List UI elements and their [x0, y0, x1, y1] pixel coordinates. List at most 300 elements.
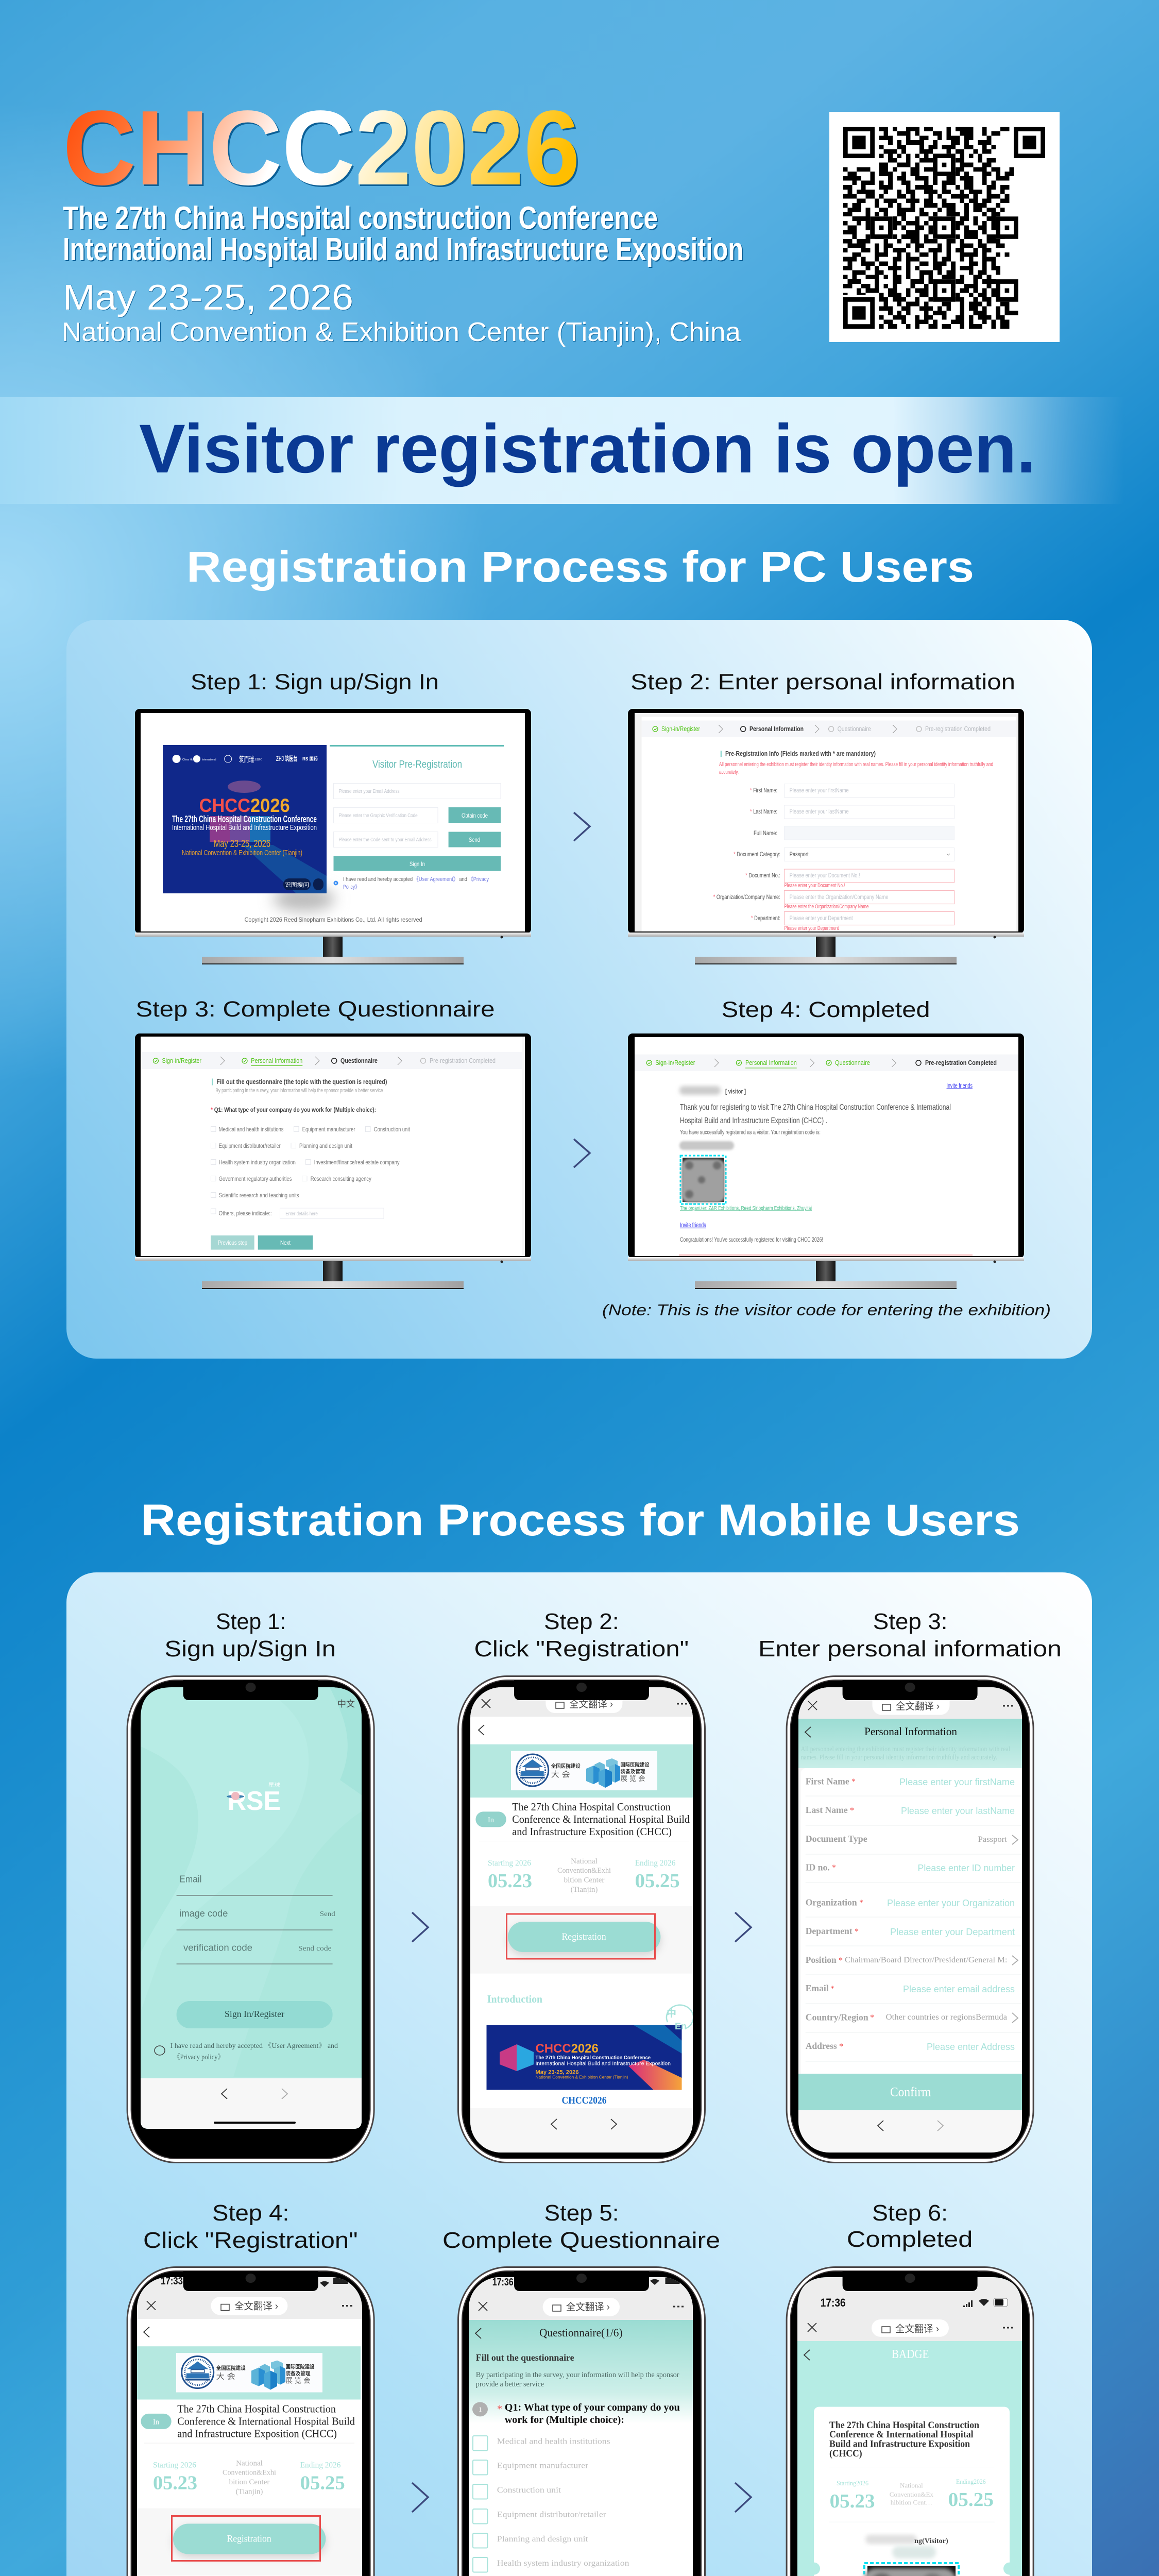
organizer logos: 展 览 会	[285, 2376, 310, 2384]
phone: personal information screen	[786, 1675, 1034, 2163]
conference poster: 识图搜问	[285, 881, 309, 888]
badge event title: (CHCC)	[829, 2448, 862, 2459]
event dates: May 23-25, 2026	[63, 277, 353, 317]
answer options: Medical and health institutions	[497, 2437, 610, 2446]
conference name: The 27th China Hospital construction Conference	[63, 200, 658, 236]
questionnaire header: provide a better service	[476, 2380, 544, 2388]
mobile step 2 label	[474, 1609, 689, 1662]
questionnaire heading: * Q1: What type of your company do you work for (Multiple choice):	[211, 1106, 376, 1113]
registration form	[330, 745, 504, 890]
form card: Please enter email address	[903, 1984, 1015, 1994]
confirmation message: Hospital Build and Infrastructure Exposition (CHCC) .	[680, 1116, 827, 1125]
form fields: * Document No.:	[745, 872, 780, 879]
RSE logo: 星球	[268, 1782, 280, 1788]
form card: Other countries or regionsBermuda	[886, 2013, 1007, 2022]
form card: Department	[806, 1926, 853, 1936]
questionnaire header	[469, 2320, 693, 2424]
badge dates and venue: hibition Cent…	[891, 2499, 932, 2506]
progress nav: Questionnaire	[835, 1059, 870, 1066]
form fields: Please enter your Department	[784, 925, 839, 931]
event dates and venue: Starting 2026	[488, 1859, 531, 1868]
progress nav: Pre-registration Completed	[925, 1059, 997, 1066]
event title: The 27th China Hospital Construction	[177, 2403, 336, 2415]
conference poster: National Convention & Exhibition Center (Tianjin)	[182, 849, 302, 857]
event dates and venue: Convention&Exhi	[557, 1867, 611, 1875]
visitor QR code, blurred	[863, 2563, 959, 2576]
form fields: * Document Category:	[734, 851, 780, 858]
progress nav: Personal Information	[745, 1059, 797, 1066]
copyright: Copyright 2026 Reed Sinopharm Exhibitions Co., Ltd. All rights reserved	[245, 916, 422, 923]
conference poster: ZHJ 筑医台	[276, 755, 297, 762]
event title: In	[153, 2418, 159, 2427]
progress nav	[642, 721, 1016, 737]
agreement checkbox: I have read and hereby accepted 《User Agreement》 and	[171, 2042, 338, 2050]
badge dates and venue: National	[900, 2482, 923, 2489]
confirm button	[798, 2074, 1022, 2110]
badge event title: Conference & International Hospital	[829, 2429, 974, 2440]
form card: *	[839, 1956, 843, 1965]
form heading: accurately.	[719, 769, 739, 775]
conference poster: 筑而瑞	[239, 755, 254, 764]
visitor name, blurred: [ visitor ]	[725, 1088, 746, 1095]
RSE logo	[227, 1782, 280, 1810]
registration form: Please enter your Email Address	[339, 789, 400, 794]
form heading	[719, 750, 993, 775]
progress nav	[635, 1055, 1018, 1071]
question one: Q1: What type of your company do you	[505, 2402, 680, 2413]
wave background	[141, 1687, 362, 2129]
mobile step 4 label: Click "Registration"	[143, 2228, 358, 2253]
phone: questionnaire screen	[457, 2266, 706, 2576]
visitor QR code, blurred	[680, 1156, 726, 1204]
form card: ID no.	[806, 1862, 830, 1873]
browser header: 全文翻译 ›	[566, 2301, 610, 2313]
progress nav: Personal Information	[749, 725, 804, 733]
introduction section: National Convention & Exhibition Center (Tianjin)	[536, 2075, 628, 2079]
form card: Please enter Address	[927, 2042, 1015, 2052]
browser nav bar	[878, 2121, 943, 2131]
mobile step 3 label: Step 3:	[873, 1609, 948, 1634]
form card: Organization	[806, 1897, 857, 1908]
organizer and footer links: Invite friends	[680, 1221, 706, 1229]
event venue: National Convention & Exhibition Center (Tianjin), China	[62, 317, 741, 347]
question one	[472, 2402, 680, 2426]
previous and next buttons	[211, 1235, 313, 1250]
event title	[141, 2403, 355, 2443]
phone: click registration screen	[457, 1675, 706, 2163]
event detail content: 全文翻译 ›	[569, 1699, 613, 1710]
badge dates and venue: Starting2026	[837, 2479, 868, 2487]
answer options: Equipment distributor/retailer	[497, 2511, 606, 2519]
status bar	[161, 2276, 348, 2287]
event title: The 27th China Hospital Construction	[512, 1801, 671, 1813]
event dates and venue: 05.23	[153, 2472, 197, 2494]
organizer logos: 展 览 会	[620, 1774, 645, 1783]
badge dates and venue: 05.23	[830, 2490, 875, 2512]
questionnaire options: Construction unit	[374, 1126, 410, 1133]
confirmation message	[679, 1103, 951, 1150]
agreement checkbox: 《Privacy policy》	[174, 2053, 224, 2061]
questionnaire options	[211, 1126, 410, 1219]
event detail content	[131, 2297, 361, 2576]
introduction section: CHCC2026	[561, 2095, 607, 2106]
answer options: Planning and design unit	[497, 2535, 588, 2544]
form card: First Name	[806, 1776, 849, 1787]
phone: sign in screen	[127, 1675, 375, 2163]
progress nav: Pre-registration Completed	[925, 725, 991, 733]
form card: Email	[806, 1983, 829, 1993]
form card: Position	[806, 1955, 837, 1965]
browser header: 全文翻译 ›	[896, 1701, 940, 1712]
event title	[475, 1801, 690, 1841]
organizer logos: 装备及管理	[620, 1768, 645, 1775]
questionnaire options: Equipment distributor/retailer	[219, 1142, 281, 1149]
conference poster: International	[202, 758, 216, 761]
organizer logos: 国际医院建设	[620, 1761, 649, 1768]
progress nav: Sign-in/Register	[661, 725, 701, 733]
mobile step 4 label	[143, 2200, 358, 2253]
sign-in fields: image code	[179, 1908, 228, 1919]
answer options: Equipment manufacturer	[497, 2462, 589, 2470]
form card: *	[851, 1777, 856, 1786]
mobile step 1 label: Step 1:	[216, 1609, 286, 1634]
monitor: step 2 personal information screen	[628, 709, 1024, 964]
introduction section	[486, 1993, 693, 2106]
confirm button: Confirm	[890, 2086, 931, 2099]
form header: names. Please fill in your personal identity information truthfully and accurately.	[801, 1754, 997, 1761]
event title: Conference & International Hospital Build	[177, 2415, 355, 2428]
event title: In	[488, 1816, 494, 1824]
introduction section: May 23-25, 2026	[536, 2070, 579, 2076]
form card: *	[850, 1806, 854, 1815]
form heading: Pre-Registration Info (Fields marked with * are mandatory)	[725, 750, 876, 757]
badge header: BADGE	[892, 2348, 929, 2361]
header: event title block	[62, 89, 743, 347]
questionnaire heading: Fill out the questionnaire (the topic with the question is required)	[216, 1078, 387, 1086]
introduction section: 中	[667, 2008, 676, 2019]
sign-in fields: Send	[320, 1910, 335, 1918]
registration form: Send	[469, 836, 480, 843]
event detail content: 全文翻译 ›	[234, 2301, 278, 2312]
organizer logos: 国际医院建设	[285, 2364, 314, 2370]
badge card	[808, 2407, 1016, 2576]
conference poster	[163, 745, 327, 893]
browser header: 17:36	[821, 2296, 846, 2309]
sign-in button: Sign In/Register	[225, 2009, 284, 2019]
organizer logos	[511, 1751, 657, 1790]
form card: Please enter your Department	[890, 1927, 1015, 1937]
sign-in fields: verification code	[183, 1942, 252, 1953]
answer options: Health system industry organization	[497, 2559, 629, 2568]
invite friends link: Invite friends	[947, 1082, 973, 1090]
arrow: step 1 to step 2	[574, 812, 590, 841]
sign-in fields: Email	[179, 1874, 201, 1885]
exposition name: International Hospital Build and Infrastructure Exposition	[63, 232, 743, 267]
browser header	[798, 1687, 1022, 1719]
registration button, highlighted	[470, 1906, 693, 1974]
questionnaire heading	[211, 1078, 387, 1113]
arrow: mobile step 5 to 6	[735, 2483, 751, 2512]
badge event title: The 27th China Hospital Construction	[829, 2420, 979, 2431]
form fields: * First Name:	[750, 787, 777, 794]
badge dates and venue: Convention&Ex	[890, 2490, 934, 2498]
form fields: Please enter your Document No.!	[790, 872, 860, 879]
event dates and venue: (Tianjin)	[571, 1886, 598, 1894]
progress nav: Pre-registration Completed	[430, 1057, 496, 1064]
organizer and footer links: The organizer: Z&R Exhibitions, Reed Sinopharm Exhibitions, Zhuyitai	[680, 1205, 812, 1211]
organizer logos: 大 会	[216, 2372, 235, 2381]
form card: *	[832, 1863, 836, 1872]
badge dates and venue	[829, 2478, 995, 2522]
visitor name, blurred	[679, 1086, 746, 1095]
mobile step 4 label: Step 4:	[212, 2200, 289, 2226]
event dates and venue: bition Center	[229, 2478, 269, 2486]
form card: Chairman/Board Director/President/General M:	[845, 1956, 1008, 1964]
form card: Passport	[978, 1835, 1007, 1844]
conference poster: CHCC2026	[199, 795, 290, 816]
banner: visitor registration is open: Visitor registration is open.	[139, 411, 1036, 487]
visitor name, blurred	[865, 2535, 948, 2558]
registration form: Sign In	[410, 860, 425, 868]
form card: *	[839, 2042, 843, 2051]
note: visitor code: (Note: This is the visitor code for entering the exhibition)	[602, 1301, 1051, 1319]
step 1 label: Step 1: Sign up/Sign In	[191, 670, 439, 694]
organizer logos: 全国医院建设	[216, 2365, 246, 2371]
organizer logos: 全国医院建设	[551, 1762, 581, 1769]
registration form: Policy》	[343, 884, 360, 890]
event dates and venue: bition Center	[564, 1876, 604, 1885]
browser header: 全文翻译 ›	[895, 2324, 939, 2335]
mobile step 1 label: Sign up/Sign In	[164, 1636, 336, 1662]
conference poster: China Hospital	[182, 758, 199, 761]
form card: *	[830, 1985, 834, 1993]
event dates and venue: Ending 2026	[635, 1859, 675, 1868]
form card: *	[855, 1927, 859, 1936]
event dates and venue: National	[571, 1857, 598, 1866]
questionnaire options: Enter details here	[285, 1211, 318, 1217]
registration form: Obtain code	[462, 812, 488, 819]
questionnaire heading: By participating in the survey, your information will help the sponsor provide a better service	[215, 1088, 383, 1094]
form fields: * Organization/Company Name:	[713, 893, 780, 901]
badge event title: Build and Infrastructure Exposition	[829, 2439, 970, 2450]
progress nav: Questionnaire	[838, 725, 871, 733]
RSE logo: RSE	[228, 1786, 281, 1816]
form fields: * Last Name:	[750, 808, 777, 815]
form card: Please enter your firstName	[899, 1777, 1015, 1787]
form fields: * Department:	[751, 914, 780, 922]
event dates and venue: National	[236, 2460, 263, 2468]
registration button, highlighted: Registration	[561, 1931, 606, 1942]
mobile step 6 label: Step 6:	[872, 2200, 948, 2226]
event detail content	[470, 1687, 693, 2153]
questionnaire options: Health system industry organization	[219, 1159, 296, 1166]
form card: Address	[806, 2041, 837, 2051]
progress nav: Sign-in/Register	[655, 1059, 695, 1066]
phone: completed badge screen	[786, 2266, 1034, 2576]
panel: PC registration steps	[66, 620, 1092, 1359]
progress nav	[142, 1052, 522, 1069]
conference poster: International Hospital Build and Infrastructure Exposition	[172, 823, 317, 832]
step 3 label: Step 3: Complete Questionnaire	[136, 997, 495, 1022]
mobile step 2 label: Click "Registration"	[474, 1636, 689, 1662]
questionnaire options: Research consulting agency	[311, 1175, 371, 1182]
form card: Please enter ID number	[918, 1863, 1015, 1873]
badge header	[804, 2348, 929, 2361]
mobile step 2 label: Step 2:	[544, 1609, 619, 1634]
questionnaire options: Scientific research and teaching units	[219, 1192, 299, 1199]
confirmation message: Thank you for registering to visit The 27th China Hospital Construction Conference & International	[680, 1103, 951, 1112]
event title: and Infrastructure Exposition (CHCC)	[512, 1825, 672, 1838]
form fields: Please enter the Organization/Company Name	[790, 893, 889, 901]
questionnaire options: Others, please indicate::	[219, 1210, 272, 1217]
mobile step 6 label: Completed	[847, 2227, 973, 2252]
conference poster: RS 国药	[302, 756, 318, 761]
introduction section: The 27th China Hospital Construction Conference	[536, 2055, 651, 2061]
form fields: Please enter your firstName	[790, 787, 849, 794]
introduction section: CHCC2026	[536, 2042, 599, 2056]
arrow: step 3 to step 4	[574, 1139, 590, 1167]
event dates and venue	[153, 2460, 345, 2496]
conference poster: May 23-25, 2026	[214, 838, 270, 850]
questionnaire options: Investment/finance/real estate company	[314, 1159, 400, 1166]
badge dates and venue: 05.25	[948, 2489, 994, 2511]
conference poster: The 27th China Hospital Construction Conference	[172, 814, 317, 824]
form header: Personal Information	[864, 1725, 957, 1738]
mobile step 5 label	[442, 2200, 720, 2253]
registration button, highlighted: Registration	[227, 2534, 271, 2544]
form card: Please enter your lastName	[901, 1806, 1015, 1816]
previous and next buttons: Next	[280, 1239, 291, 1246]
event dates and venue: 05.25	[300, 2472, 345, 2494]
event dates and venue: Ending 2026	[300, 2461, 340, 2470]
monitor: step 4 completed screen	[628, 1033, 1024, 1289]
progress nav: Personal Information	[251, 1057, 302, 1064]
mobile step 6 label	[847, 2200, 973, 2252]
browser nav bar	[470, 2108, 693, 2153]
question one: 1	[479, 2405, 482, 2413]
badge event title	[829, 2420, 995, 2467]
event title: Conference & International Hospital Build	[512, 1813, 690, 1825]
mobile step 3 label	[758, 1609, 1062, 1662]
registration form: I have read and hereby accepted 《User Agreement》 and 《Privacy	[343, 876, 489, 883]
form header: All personnel entering the exhibition must register their identity information with real	[801, 1745, 1010, 1753]
heading: PC users: Registration Process for PC Users	[186, 543, 974, 591]
visitor name, blurred: ng(Visitor)	[914, 2537, 948, 2545]
questionnaire options: Medical and health institutions	[219, 1126, 283, 1133]
heading: mobile users: Registration Process for Mobile Users	[141, 1496, 1020, 1545]
logo wordmark: CHCC2026: CHCC2026	[63, 89, 580, 207]
form card: Document Type	[806, 1834, 867, 1844]
browser header: 17:36	[492, 2277, 514, 2288]
introduction section: International Hospital Build and Infrastructure Exposition	[536, 2061, 671, 2067]
registration form: Please enter the Graphic Verification Code	[339, 813, 418, 819]
step 2 label: Step 2: Enter personal information	[630, 670, 1015, 694]
event title: and Infrastructure Exposition (CHCC)	[177, 2428, 337, 2440]
event dates and venue: 05.25	[635, 1870, 680, 1892]
form fields: Please enter your lastName	[790, 808, 849, 815]
organizer logos: 装备及管理	[285, 2370, 310, 2377]
sign-in button	[177, 2001, 333, 2028]
form fields: Please enter your Document No.!	[784, 883, 845, 889]
sign-in fields: Send code	[298, 1945, 332, 1953]
questionnaire header: Fill out the questionnaire	[476, 2352, 574, 2363]
organizer logos	[176, 2353, 322, 2393]
questionnaire header: Questionnaire(1/6)	[539, 2326, 623, 2339]
arrow: mobile step 4 to 5	[412, 2483, 428, 2512]
sign-in fields	[177, 1874, 335, 1964]
form card: *	[870, 2013, 874, 2022]
answer options: Construction unit	[497, 2486, 561, 2495]
banner: visitor registration is open	[0, 397, 1159, 504]
mobile step 5 label: Step 5:	[544, 2200, 619, 2226]
mobile step 1 label	[164, 1609, 336, 1662]
browser header	[469, 2277, 693, 2320]
form heading: All personnel entering the exhibition must register their identity information with real names. Please fill in your personal identity information truthfully and	[719, 761, 993, 768]
registration button, highlighted	[131, 2508, 361, 2575]
previous and next buttons: Previous step	[218, 1239, 247, 1246]
event dates and venue: (Tianjin)	[236, 2487, 263, 2496]
organizer logos: 大 会	[551, 1770, 570, 1779]
mobile step 3 label: Enter personal information	[758, 1636, 1062, 1662]
arrow: mobile step 2 to 3	[735, 1912, 751, 1942]
event dates and venue: Convention&Exhi	[223, 2469, 276, 2477]
confirmation message: You have successfully registered as a visitor. Your registration code is:	[680, 1129, 821, 1136]
monitor: step 1 sign in screen	[135, 709, 531, 964]
form card: Country/Region	[806, 2012, 868, 2022]
form card: Last Name	[806, 1805, 848, 1815]
badge dates and venue: Ending2026	[956, 2478, 986, 2485]
questionnaire options: Government regulatory authorities	[219, 1175, 292, 1182]
browser header	[797, 2277, 1022, 2341]
form card: *	[859, 1899, 863, 1907]
agreement checkbox	[155, 2042, 338, 2061]
organizer and footer links: Congratulations! You've successfully registered for visiting CHCC 2026!	[680, 1236, 823, 1243]
introduction section: Introduction	[487, 1993, 542, 2005]
questionnaire header: By participating in the survey, your information will help the sponsor	[476, 2371, 679, 2379]
form fields: Full Name:	[754, 829, 777, 837]
form header	[798, 1719, 1022, 1768]
browser nav bar	[141, 2078, 362, 2129]
introduction section: En	[675, 2021, 687, 2031]
organizer and footer links	[679, 1205, 973, 1256]
questionnaire options: Planning and design unit	[299, 1142, 352, 1149]
question one: work for (Multiple choice):	[505, 2414, 624, 2426]
event dates and venue	[488, 1857, 680, 1894]
language toggle: 中文	[337, 1699, 355, 1709]
event dates and venue: 05.23	[488, 1870, 532, 1892]
form fields: Passport	[790, 851, 809, 858]
monitor: step 3 questionnaire screen	[135, 1033, 531, 1289]
answer options	[473, 2436, 642, 2576]
phone: click registration screen, repeat	[127, 2266, 375, 2576]
panel: mobile registration steps	[66, 1572, 1092, 2576]
conference poster: Z&R	[254, 758, 262, 761]
questionnaire options: Equipment manufacturer	[302, 1126, 355, 1133]
progress nav: Questionnaire	[340, 1057, 378, 1064]
step 4 label: Step 4: Completed	[722, 997, 930, 1022]
event dates and venue: Starting 2026	[153, 2461, 196, 2470]
registration form: Visitor Pre-Registration	[372, 759, 462, 770]
form fields	[713, 784, 954, 931]
poster shadow	[273, 887, 335, 911]
QR code	[829, 112, 1060, 342]
progress nav: Sign-in/Register	[162, 1057, 202, 1064]
form fields: Please enter the Organization/Company Name	[784, 904, 868, 910]
form fields: Please enter your Department	[790, 914, 853, 922]
form card: Please enter your Organization	[887, 1898, 1015, 1908]
question one: *	[497, 2403, 502, 2415]
arrow: mobile step 1 to 2	[412, 1912, 428, 1942]
